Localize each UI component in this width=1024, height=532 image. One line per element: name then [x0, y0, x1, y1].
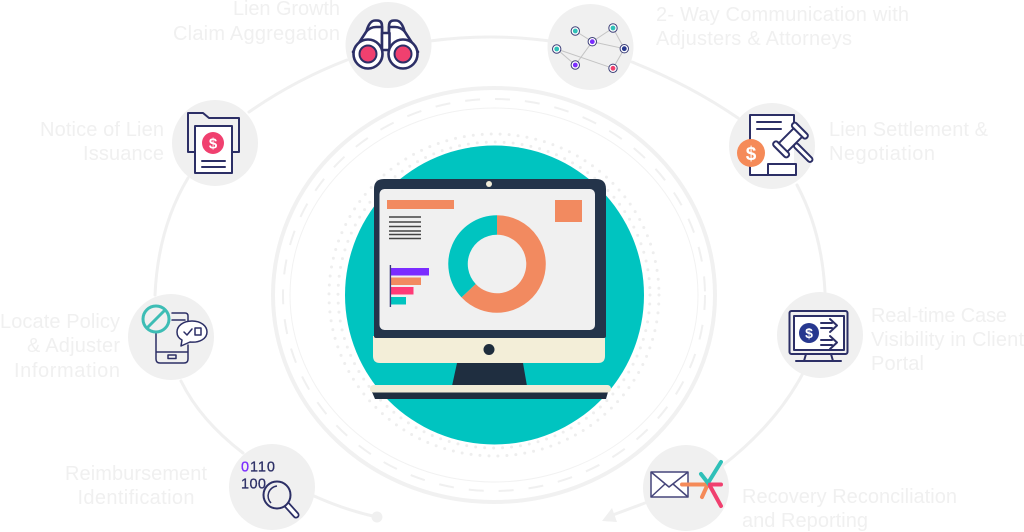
label: Adjusters & Attorneys [656, 28, 852, 50]
label: and Reporting [742, 510, 868, 532]
icon: document and gavel [737, 115, 823, 175]
orbit arrow [602, 503, 645, 522]
step: Recovery Reconciliation and Reporting [643, 445, 957, 532]
icon: branching arrows [682, 462, 721, 506]
badge background [729, 103, 815, 189]
step: Reimbursement Identification [65, 444, 315, 530]
outer orbit connecting the steps [155, 37, 825, 466]
screen [380, 189, 595, 330]
step: Notice of Lien Issuance [40, 100, 258, 186]
badge background [128, 294, 214, 380]
teal centre circle [345, 146, 644, 444]
monitor button [484, 344, 494, 355]
icon: document and gavel: $ [746, 144, 757, 165]
donut chart [458, 225, 536, 303]
camera [486, 181, 492, 187]
label: Notice of Lien [40, 119, 164, 141]
label: Reimbursement [65, 463, 207, 485]
label: Recovery Reconciliation [742, 486, 957, 508]
label: 2- Way Communication with [656, 4, 909, 26]
icon: screen with arrows [790, 311, 848, 361]
label: Claim Aggregation [173, 23, 340, 45]
badge background [643, 445, 729, 531]
icon: folder and invoice [188, 113, 239, 173]
badge background [346, 2, 432, 88]
icon: binary digits: 0110 [241, 460, 275, 476]
desktop monitor illustration [370, 179, 611, 399]
step: Locate Policy & Adjuster Information [0, 294, 214, 382]
badge background [172, 100, 258, 186]
bar chart [390, 265, 429, 307]
title bar [387, 200, 454, 209]
monitor base [370, 385, 611, 399]
monitor stand [452, 363, 527, 386]
monitor bezel [374, 179, 606, 338]
monitor chin [373, 336, 605, 363]
label: Real-time Case [871, 305, 1007, 327]
icon: binary digits: 100 [241, 476, 266, 492]
icon: screen with arrows: $ [805, 325, 813, 341]
label: Portal [871, 353, 924, 375]
label: Information [14, 360, 120, 382]
concentric decorative rings [273, 88, 715, 502]
label: & Adjuster [27, 335, 120, 357]
label: Locate Policy [0, 311, 120, 333]
label: Lien Settlement & [829, 119, 989, 141]
badge background [548, 4, 634, 90]
text lines [389, 217, 421, 238]
step: Lien Settlement & Negotiation [729, 103, 989, 189]
label: Negotiation [829, 143, 935, 165]
step: 2-Way Communication [548, 4, 909, 90]
icon: envelope [651, 472, 688, 497]
step: Real-time Case Visibility [777, 292, 1024, 378]
badge background [777, 292, 863, 378]
label: Visibility in Client [871, 329, 1024, 351]
icon: network [552, 24, 628, 73]
icon: folder and invoice: $ [209, 136, 218, 152]
step: Lien Growth Claim Aggregation [173, 0, 432, 88]
label: Issuance [83, 143, 164, 165]
icon: phone and chat [143, 306, 207, 363]
label: Identification [78, 487, 194, 509]
icon: binoculars [353, 20, 418, 68]
orange square [555, 200, 582, 222]
icon: magnifier [264, 482, 296, 515]
orbit end with dot [314, 496, 382, 522]
badge background [229, 444, 315, 530]
